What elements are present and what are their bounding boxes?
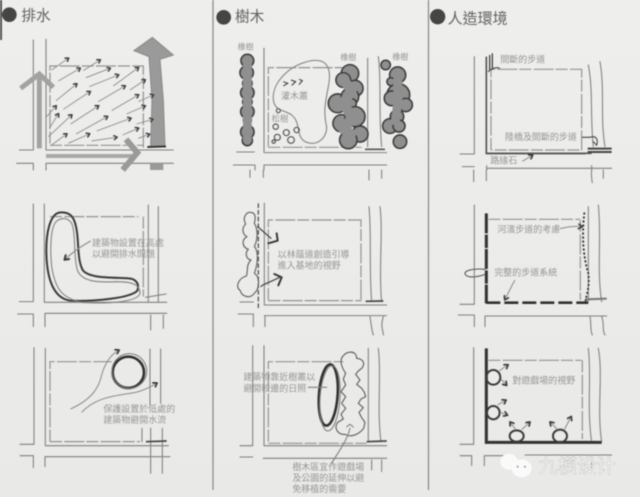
- labels: 間斷的步道: [500, 53, 545, 64]
- play nodes with view arrows: [486, 365, 571, 442]
- panel: building near trees: [240, 346, 387, 494]
- arrow: large left up arrow: [21, 74, 53, 148]
- site boundary: [50, 217, 143, 297]
- callout text: [494, 224, 560, 277]
- callout text: 河濱步道的考慮: [497, 224, 560, 235]
- callout: grove text: [292, 461, 364, 494]
- callout text: [103, 403, 175, 425]
- heading: trees: 樹木: [235, 9, 265, 26]
- pavement crossing: [588, 149, 612, 152]
- callout: building text: [243, 371, 315, 394]
- building circle: [112, 354, 147, 388]
- callout: grove text: 樹木區宜作遊戲場: [292, 461, 364, 472]
- building footprint L shape: [46, 212, 138, 301]
- icon: heading bullet trees: [216, 10, 231, 25]
- callout: grove text: 免移植的需要: [292, 483, 346, 494]
- site boundary: [488, 219, 580, 300]
- thick sidewalk left: [482, 213, 491, 303]
- thick site edge: [486, 348, 602, 442]
- water flow arrows: [71, 350, 119, 409]
- heading: built environment: 人造環境: [448, 9, 508, 27]
- callout arrows: [465, 226, 582, 299]
- callout text: 建築物避開水流: [103, 414, 166, 425]
- tree grove outline: [336, 352, 366, 436]
- tree labels: 橡樹: [340, 52, 356, 62]
- road lines: [240, 346, 387, 472]
- shrub and pine labels: 松樹: [272, 113, 288, 123]
- arrow: diagonal flow chevron: [123, 139, 137, 170]
- shrub marks: [283, 79, 302, 86]
- panel: continuous sidewalk system: [458, 170, 607, 335]
- sidewalk edge: [486, 57, 592, 153]
- tree line outline: [238, 212, 259, 297]
- middle oak cluster: [328, 65, 368, 149]
- road lines: [17, 39, 173, 170]
- road lines: [238, 170, 387, 335]
- dotted riverside walk: [583, 213, 589, 301]
- tree labels: [238, 41, 408, 62]
- panel: protect low-lying area: [20, 348, 175, 473]
- shrub area outline: [273, 60, 329, 143]
- callout: arrow to building: [65, 241, 91, 259]
- callout text: 以避開排水問題: [92, 248, 155, 259]
- left oak row: [240, 54, 254, 146]
- panel: built environment heading and plan: [430, 9, 612, 170]
- road lines: [233, 48, 387, 170]
- callout: building text: 建築物靠近樹叢以: [243, 371, 315, 382]
- pine trees: [272, 109, 299, 143]
- heading: drainage: 排水: [21, 8, 51, 25]
- site boundary: [268, 220, 362, 301]
- site boundary: [488, 360, 582, 439]
- site boundary: [491, 69, 582, 150]
- road lines: [18, 204, 167, 330]
- leader lines: [308, 387, 353, 463]
- watermark: 九模设计: [538, 455, 616, 477]
- callout text: 建築物設置在高處: [92, 237, 164, 248]
- arrow: large right up arrow: [134, 37, 173, 147]
- dashed alley line: [256, 203, 260, 310]
- road lines: [460, 348, 612, 468]
- icon: heading bullet drainage: [2, 7, 17, 22]
- tree labels: 橡樹: [238, 41, 254, 51]
- callout text: 完整的步道系統: [494, 266, 557, 277]
- thick sidewalk bottom: [486, 299, 588, 307]
- icon: heading bullet built environment: [430, 9, 445, 24]
- right oak cluster: [381, 60, 412, 148]
- site boundary: [268, 68, 362, 147]
- road lines: [458, 170, 607, 335]
- panel: tree species: [216, 9, 412, 170]
- labels: 路緣石: [490, 154, 517, 165]
- callout text: 以林蔭道創造引導: [278, 248, 350, 259]
- site boundary: [268, 362, 367, 443]
- building ellipse: [317, 364, 342, 432]
- callout text: [92, 237, 164, 259]
- shrub and pine labels: 灌木叢: [281, 90, 308, 101]
- arrows: view into site: [258, 227, 282, 287]
- leader marks: [488, 68, 597, 145]
- watermark: [500, 454, 616, 477]
- panel: building on high ground: [18, 204, 167, 330]
- callout text: [278, 248, 350, 271]
- tree labels: 橡樹: [392, 51, 408, 61]
- road lines: [20, 348, 170, 473]
- panel: tree-lined view corridor: [238, 170, 387, 335]
- labels: 陸橋及間斷的步道: [505, 131, 577, 142]
- surface flow arrows: [47, 58, 153, 145]
- panel: drainage site plan: [2, 7, 173, 170]
- callout text: 進入基地的視野: [278, 260, 341, 271]
- callout text: 對遊戲場的視野: [512, 375, 575, 386]
- panel: views to playground: [460, 348, 616, 477]
- callout text: 保護設置於低處的: [103, 403, 175, 414]
- site boundary: [50, 66, 143, 148]
- label arrow to curb: [522, 155, 532, 161]
- callout: grove text: 及公園的延伸以避: [292, 472, 364, 483]
- road lines: [460, 57, 612, 170]
- labels: [490, 53, 577, 165]
- site boundary: [50, 362, 140, 442]
- callout: building text: 避開較邊的日照: [243, 383, 306, 394]
- shrub and pine labels: [272, 90, 308, 123]
